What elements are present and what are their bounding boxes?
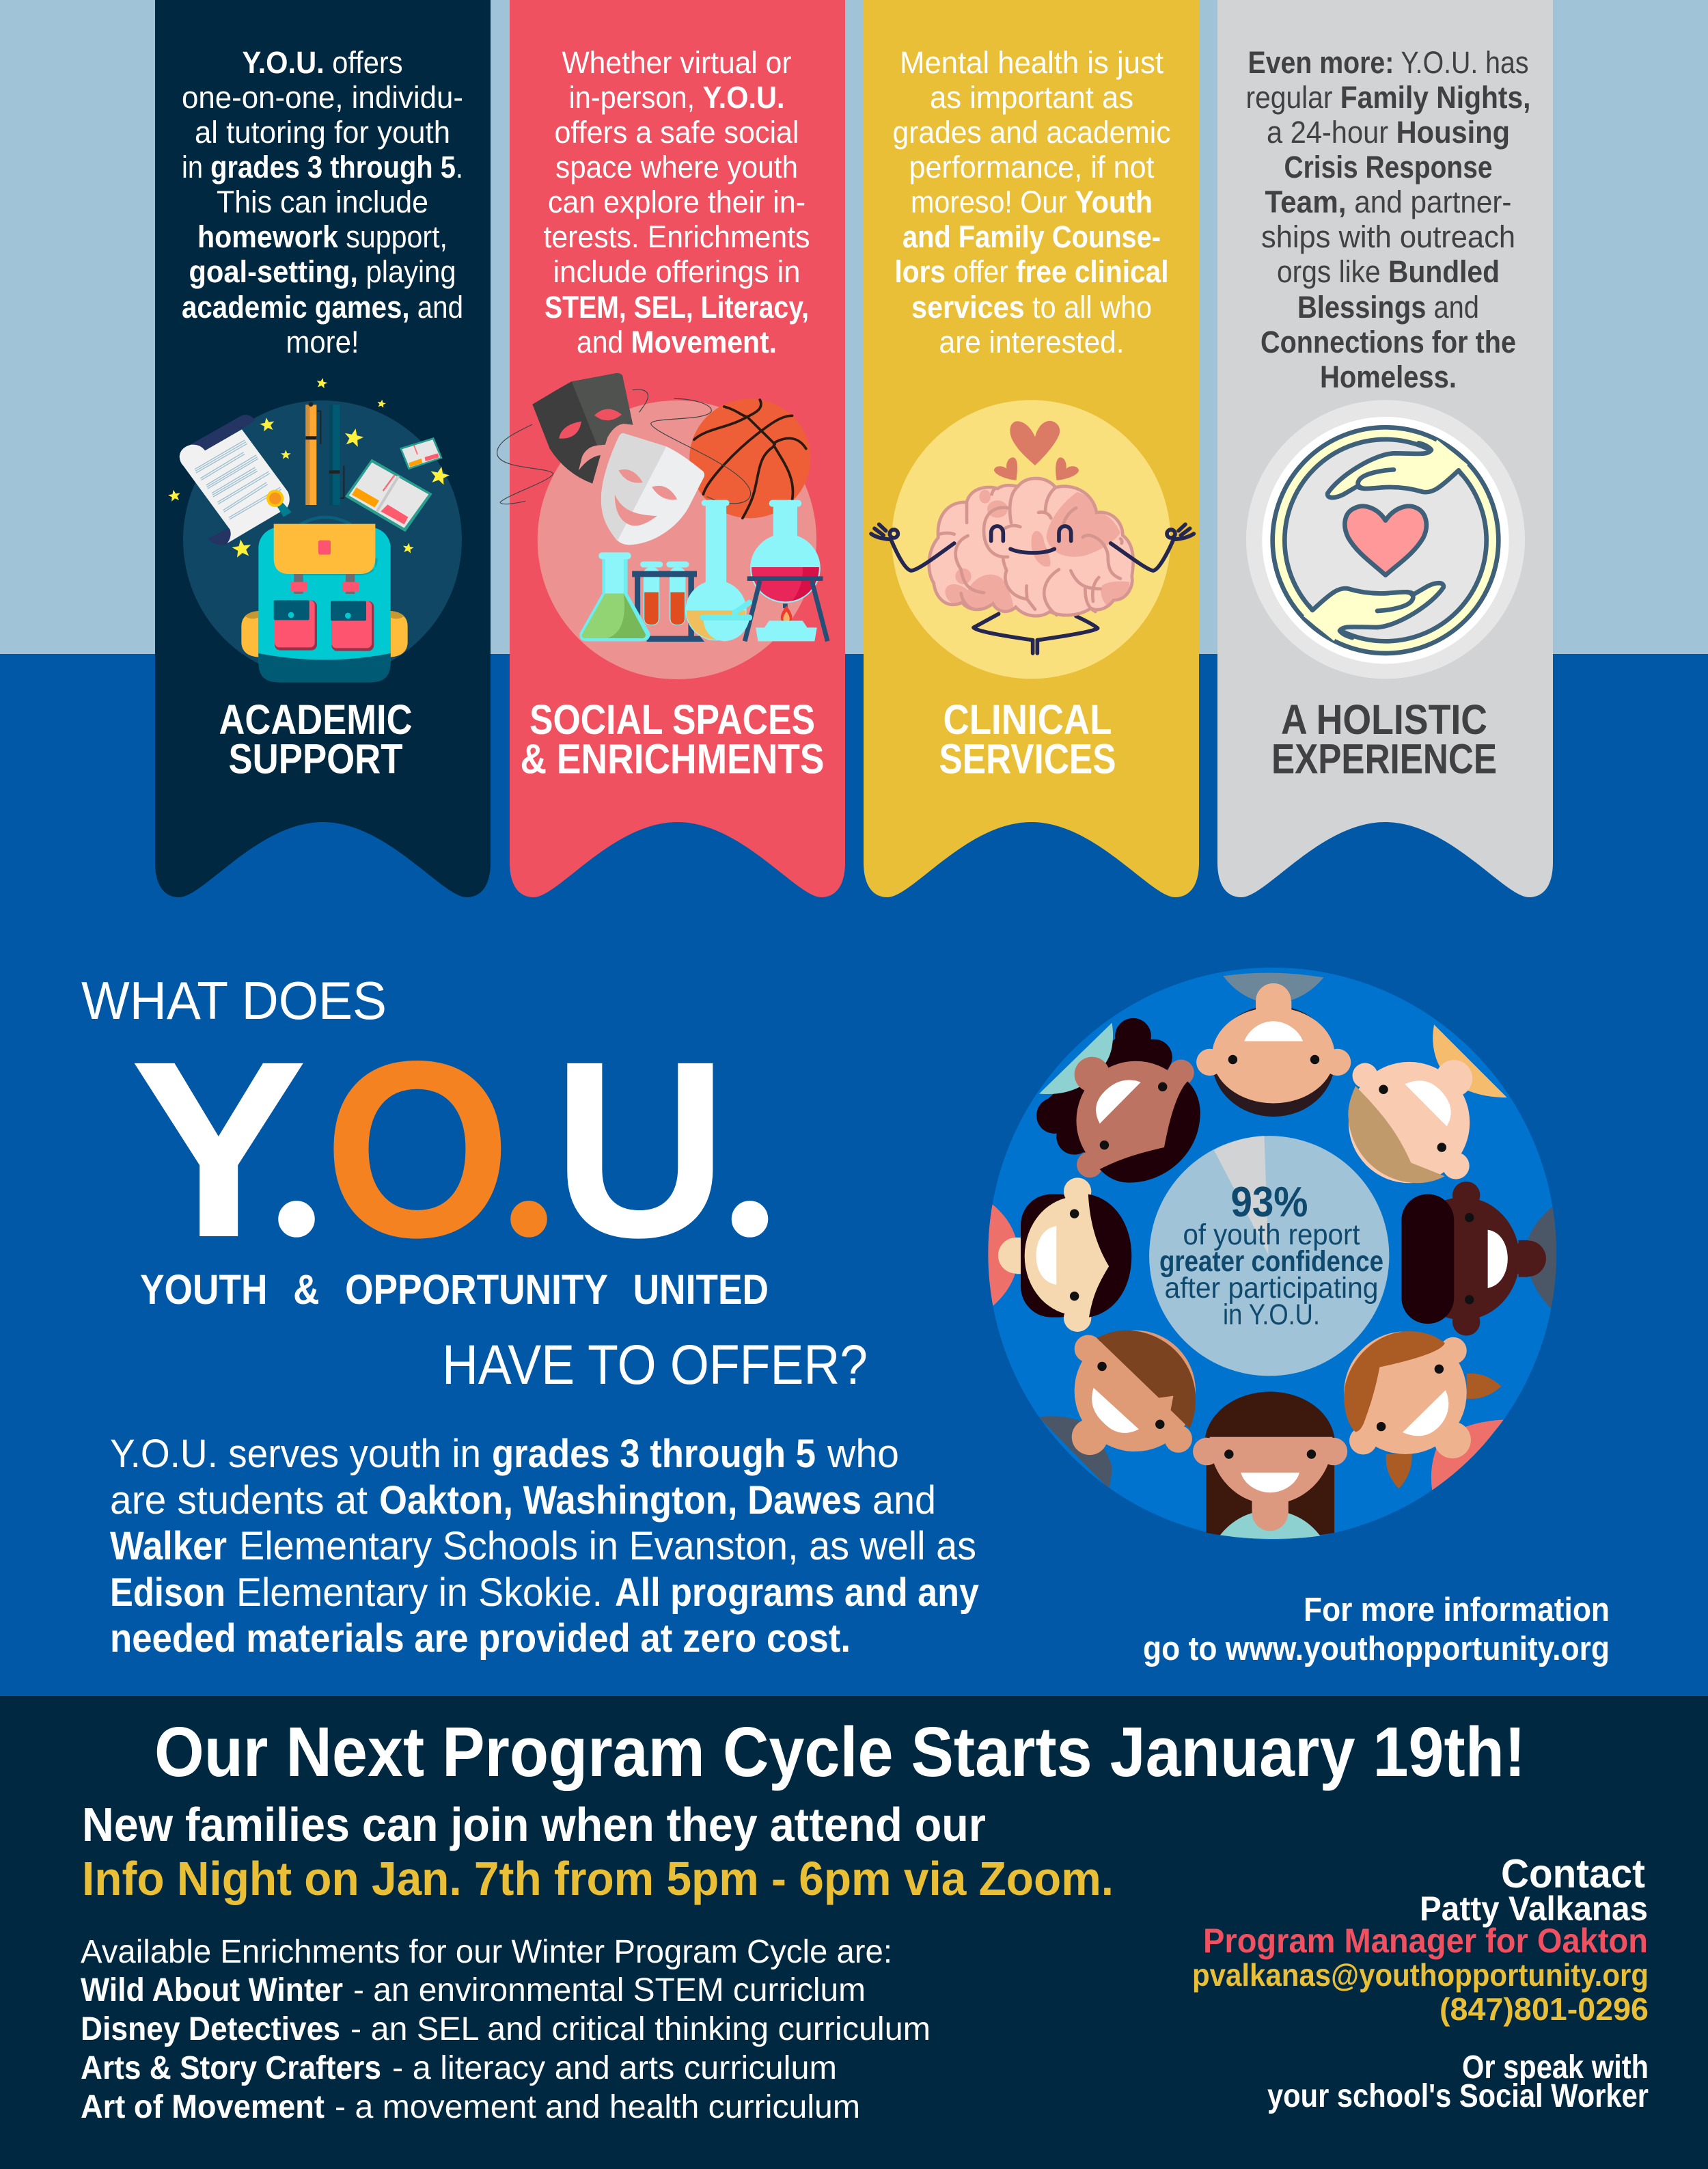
panel: a holistic experience	[1217, 0, 1553, 897]
face: top left	[1036, 1018, 1200, 1183]
text block: who Y.O.U. serves: needed materials are provided at zero cost.	[110, 1616, 851, 1661]
contact block: (847)801-0296	[1440, 1991, 1649, 2027]
contact block: pvalkanas@youthopportunity.org	[1192, 1957, 1649, 1993]
enrichments list: Arts & Story Crafters	[81, 2050, 381, 2086]
icon: masks, basketball and lab glassware	[497, 373, 827, 679]
footer headline: Our Next Program Cycle Starts January 19th!	[154, 1713, 1526, 1791]
body text: Homeless.	[1320, 359, 1457, 394]
face: right	[1401, 1182, 1546, 1336]
body text: academic games, and	[182, 290, 463, 325]
body text: as important as	[930, 80, 1133, 115]
background: blue band	[0, 654, 1708, 1696]
text block: who Y.O.U. serves	[110, 1432, 979, 1661]
logo tagline: YOUTH & OPPORTUNITY UNITED	[140, 1266, 769, 1313]
heading: A HOLISTIC	[1281, 696, 1487, 743]
icon: meditating brain with hearts	[871, 400, 1194, 679]
body text: services to all who	[911, 290, 1152, 325]
body text: can explore their in-	[548, 185, 805, 219]
info night text: New families can join when they attend our	[82, 1798, 986, 1851]
heading: have to offer: HAVE TO OFFER?	[442, 1334, 868, 1396]
body text	[544, 45, 810, 359]
body text: terests. Enrichments	[544, 219, 810, 254]
callout: more information link	[1143, 1592, 1610, 1667]
pie chart: 93 percent	[1149, 1136, 1389, 1376]
pie label: greater confidence	[1159, 1245, 1383, 1278]
body text: moreso! Our Youth	[911, 185, 1153, 219]
text block: who Y.O.U. serves: Y.O.U. serves youth in	[110, 1432, 481, 1476]
enrichments list: - an environmental STEM curriclum	[353, 1972, 866, 2008]
body text: Even more: Y.O.U. has	[1248, 45, 1529, 80]
illustration: faces	[985, 968, 1560, 1540]
ribbon shape	[864, 0, 1199, 897]
enrichments list: Disney Detectives	[81, 2011, 340, 2047]
body text	[1246, 45, 1530, 394]
panel: clinical services	[864, 0, 1199, 897]
body text: Blessings and	[1297, 290, 1479, 325]
body text: STEM, SEL, Literacy,	[545, 290, 809, 325]
contact block: Patty Valkanas	[1420, 1890, 1648, 1928]
enrichments list	[81, 1934, 931, 2125]
body text: space where youth	[555, 150, 798, 185]
enrichments list: Available Enrichments for our Winter Program Cycle are:	[81, 1934, 892, 1970]
pie label: in Y.O.U.	[1223, 1298, 1320, 1331]
text block: who Y.O.U. serves: All programs and any	[615, 1570, 979, 1615]
text block: who Y.O.U. serves: are students at	[110, 1478, 368, 1523]
body text: are interested.	[939, 325, 1125, 359]
body text: include offerings in	[553, 254, 801, 289]
body text: grades and academic	[892, 115, 1171, 150]
contact block: Program Manager for Oakton	[1203, 1922, 1648, 1960]
text block: who Y.O.U. serves: Elementary Schools in Evanston, as well as	[239, 1524, 976, 1568]
info night text	[82, 1798, 1114, 1905]
heading: & ENRICHMENTS	[521, 735, 824, 782]
contact block: Or speak with	[1462, 2049, 1649, 2086]
body text: performance, if not	[909, 150, 1155, 185]
body text: lors offer free clinical	[895, 254, 1168, 289]
body text: in-person, Y.O.U.	[568, 80, 784, 115]
body text: This can include	[217, 185, 428, 219]
pie label: 93%	[1231, 1179, 1308, 1226]
heading: SOCIAL SPACES	[529, 696, 815, 743]
body text	[892, 45, 1171, 359]
body text: al tutoring for youth	[195, 115, 450, 150]
enrichments list: Art of Movement	[81, 2089, 325, 2125]
contact block	[1192, 1851, 1649, 2114]
pie label	[1159, 1179, 1383, 1331]
heading: EXPERIENCE	[1271, 735, 1497, 782]
face: top right	[1348, 1060, 1472, 1183]
logo: Y.O.U.: O	[324, 1009, 511, 1290]
body text: Y.O.U. offers	[242, 45, 403, 80]
text block: who Y.O.U. serves: grades 3 through 5	[492, 1432, 816, 1476]
body text: Connections for the	[1261, 325, 1516, 359]
enrichments list: Wild About Winter	[81, 1972, 343, 2008]
heading: CLINICAL	[943, 696, 1112, 743]
callout: more information link: go to www.youthopportunity.org	[1143, 1631, 1610, 1667]
pie label: of youth report	[1183, 1218, 1360, 1251]
body text: in grades 3 through 5.	[182, 150, 463, 185]
ribbon shape	[510, 0, 845, 897]
body text: Crisis Response	[1284, 150, 1492, 185]
icon: backpack with scroll, pens, books and stars	[167, 377, 462, 682]
body text: Team, and partner-	[1265, 185, 1511, 219]
heading: ACADEMIC	[219, 696, 413, 743]
info night text: Info Night on Jan. 7th from 5pm - 6pm via Zoom.	[82, 1852, 1114, 1905]
panel: academic support	[155, 0, 491, 897]
text block: who Y.O.U. serves: Elementary in Skokie.	[236, 1570, 603, 1615]
body text: one-on-one, individu-	[182, 80, 463, 115]
body text: orgs like Bundled	[1277, 254, 1500, 289]
contact block: Contact	[1501, 1851, 1645, 1896]
body text: more!	[286, 325, 359, 359]
body text: Mental health is just	[900, 45, 1163, 80]
enrichments list: - a movement and health curriculum	[335, 2089, 860, 2125]
text block: who Y.O.U. serves: Walker	[110, 1524, 227, 1568]
logo: Y.O.U.	[130, 1009, 778, 1290]
body text: offers a safe social	[555, 115, 799, 150]
body text: a 24-hour Housing	[1267, 115, 1510, 150]
face: bottom left	[1072, 1331, 1196, 1455]
face: left	[998, 1177, 1131, 1332]
heading: what does: WHAT DOES	[81, 970, 387, 1031]
icon: hands cradling heart	[1246, 400, 1525, 679]
logo: Y.O.U.: .	[268, 1034, 325, 1283]
body text: regular Family Nights,	[1246, 80, 1530, 115]
face: bottom	[1193, 1392, 1347, 1539]
heading: SERVICES	[939, 735, 1116, 782]
body text: and Family Counse-	[903, 219, 1161, 254]
logo: Y.O.U.: .	[501, 1034, 557, 1283]
face: top	[1196, 983, 1351, 1117]
heading	[939, 696, 1116, 782]
heading	[219, 696, 413, 782]
face: bottom right	[1344, 1331, 1501, 1488]
enrichments list: - a literacy and arts curriculum	[392, 2050, 837, 2086]
logo: Y.O.U.: .	[721, 1034, 778, 1283]
callout: more information link: For more information	[1304, 1592, 1610, 1628]
enrichments list: - an SEL and critical thinking curriculum	[350, 2011, 931, 2047]
panel: social spaces and enrichments	[497, 0, 845, 897]
background: light blue band	[0, 0, 1708, 654]
heading: SUPPORT	[228, 735, 403, 782]
body text: and Movement.	[577, 325, 777, 359]
contact block: your school's Social Worker	[1267, 2078, 1649, 2114]
ribbon shape	[1217, 0, 1553, 897]
logo: Y.O.U.: U	[553, 1009, 728, 1290]
text block: who Y.O.U. serves: and	[872, 1478, 936, 1523]
chart: circle of youth faces around 93% pie	[985, 968, 1560, 1540]
pie label: after participating	[1164, 1272, 1379, 1305]
logo: Y.O.U.: Y	[130, 1009, 307, 1290]
text block: who Y.O.U. serves: Oakton, Washington, Dawes	[379, 1478, 862, 1523]
body text	[182, 45, 463, 359]
body text: homework support,	[197, 219, 447, 254]
body text: Whether virtual or	[562, 45, 792, 80]
heading	[1271, 696, 1497, 782]
text block: who Y.O.U. serves: Edison	[110, 1570, 225, 1615]
body text: goal-setting, playing	[189, 254, 456, 289]
ribbon shape	[155, 0, 491, 897]
heading	[521, 696, 824, 782]
text block: who Y.O.U. serves: who	[827, 1432, 899, 1476]
body text: ships with outreach	[1261, 219, 1515, 254]
footer band	[0, 1696, 1708, 2169]
